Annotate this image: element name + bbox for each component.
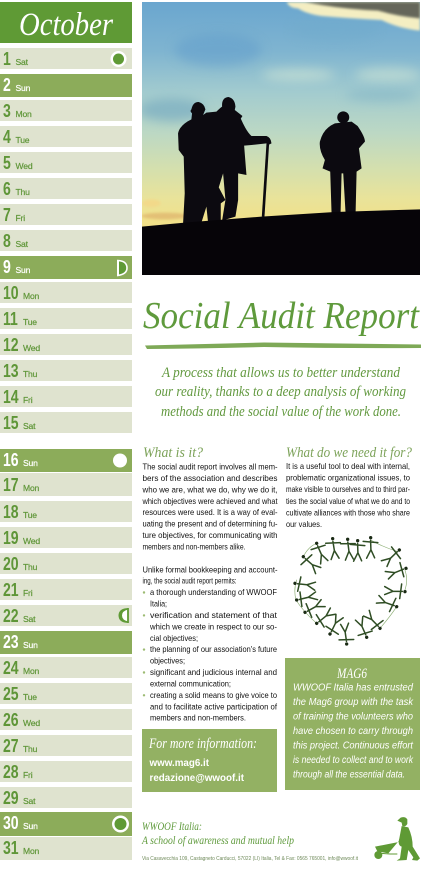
panel heading: For more information: <box>148 736 257 752</box>
day 7: 7 <box>3 205 11 225</box>
day 21: Fri <box>23 588 32 598</box>
website and email: redazione@wwoof.it <box>150 773 244 784</box>
day 2: 2 <box>3 75 11 95</box>
panel: for more information <box>142 729 277 792</box>
footer: organisation name and motto: WWOOF Italia: <box>142 819 202 833</box>
text block: what do we need it for: our values. <box>286 519 322 529</box>
illustration: heart-shaped ring of people holding hands <box>293 536 408 646</box>
day 22 with last quarter moon icon <box>0 605 132 626</box>
day 26: Wed <box>23 718 40 728</box>
text block: what do we need it for <box>286 461 410 529</box>
text block: what is it: objectives; <box>150 656 185 666</box>
text block: what is it: verification and statement of that <box>150 610 278 620</box>
text block: what is it: Italia; <box>150 598 167 608</box>
day 12: 12 <box>3 335 19 355</box>
day 22 with last quarter moon icon: Sat <box>23 614 35 624</box>
day 24: Mon <box>23 666 39 676</box>
panel text: WWOOF Italia has entrusted <box>293 682 413 693</box>
day 29: Sat <box>23 796 35 806</box>
day 26: 26 <box>3 710 19 730</box>
heading: What is it?: What is it? <box>143 445 203 461</box>
day 25: 25 <box>3 684 19 704</box>
day 2 <box>0 74 132 97</box>
day 13: Thu <box>23 369 37 379</box>
day 23 <box>0 631 132 654</box>
text block: what is it <box>142 462 278 723</box>
footer: address: Via Casavecchia 109, Castagneto Carducci, 57022 (LI) Italia, Tel & Fax: 0565 765001, info@wwoof.it <box>142 856 359 862</box>
day 5: 5 <box>3 153 11 173</box>
day 9 with half moon icon: 9 <box>3 257 11 277</box>
day 3 <box>0 100 132 121</box>
day 10: Mon <box>23 291 39 301</box>
day 15 <box>0 412 132 433</box>
day 13: 13 <box>3 361 19 381</box>
day 8 <box>0 230 132 251</box>
text block: what is it: members and non-members. <box>150 713 246 723</box>
day 30 with full moon icon <box>0 812 132 836</box>
day 31: Mon <box>23 846 39 856</box>
day 30 with full moon icon: 30 <box>3 813 19 833</box>
day 31: 31 <box>3 838 19 858</box>
day 19: 19 <box>3 528 19 548</box>
day 21: 21 <box>3 580 19 600</box>
day 15: Sat <box>23 421 35 431</box>
day 11: 11 <box>3 309 18 329</box>
day 9 with half moon icon: Sun <box>16 265 30 275</box>
day 20: 20 <box>3 554 19 574</box>
day 12: Wed <box>23 343 40 353</box>
panel text: of training the volunteers who <box>293 711 413 722</box>
panel text: have chosen to carry through <box>293 726 413 737</box>
day 25 <box>0 683 132 704</box>
day 23: 23 <box>3 632 19 652</box>
day 6: 6 <box>3 179 11 199</box>
panel heading: MAG6 <box>336 666 367 682</box>
text block: what is it: cial objectives; <box>150 633 198 643</box>
day 24 <box>0 657 132 678</box>
day 1 with full moon icon: 1 <box>3 49 11 69</box>
website and email: www.mag6.it <box>150 758 209 769</box>
day 6: Thu <box>16 187 30 197</box>
day 1 with full moon icon <box>0 48 132 69</box>
day 6 <box>0 178 132 199</box>
day 14 <box>0 386 132 407</box>
website and email <box>150 758 244 784</box>
day 3: Mon <box>16 109 32 119</box>
text block: what is it: ing, the social audit report permits: <box>142 576 236 586</box>
day 18: 18 <box>3 502 19 522</box>
day 24: 24 <box>3 658 19 678</box>
day 4: Tue <box>16 135 29 145</box>
day 17: Mon <box>23 483 39 493</box>
day 21 <box>0 579 132 600</box>
day 23: Sun <box>23 640 38 650</box>
month header: October <box>19 7 113 43</box>
day 27: Thu <box>23 744 37 754</box>
footer: organisation name and motto <box>141 819 294 847</box>
day 3: 3 <box>3 101 11 121</box>
day 4: 4 <box>3 127 11 147</box>
day 5: Wed <box>16 161 32 171</box>
panel text: this project. Continuous effort <box>293 740 414 751</box>
day 25: Tue <box>23 692 37 702</box>
day 18: Tue <box>23 510 37 520</box>
day 10 <box>0 282 132 303</box>
day 27: 27 <box>3 736 19 756</box>
day 27 <box>0 735 132 756</box>
day 28: 28 <box>3 762 19 782</box>
day 28: Fri <box>23 770 32 780</box>
subtitle <box>155 365 406 420</box>
title brush underline <box>145 342 421 349</box>
day 14: 14 <box>3 387 19 407</box>
day 11 <box>0 308 132 329</box>
text block: what is it: external communication; <box>150 678 231 688</box>
dark hillside <box>142 209 420 275</box>
day 4 <box>0 126 132 147</box>
day 17 <box>0 473 132 496</box>
day 20 <box>0 553 132 574</box>
day 13 <box>0 360 132 381</box>
day 31 <box>0 837 132 860</box>
day 7: Fri <box>16 213 25 223</box>
day 19 <box>0 527 132 548</box>
day 8: Sat <box>16 239 28 249</box>
day 9 with half moon icon <box>0 256 132 279</box>
photo: three hikers silhouetted at sunset <box>142 2 420 275</box>
day 16 with new moon icon: 16 <box>3 450 19 470</box>
day 7 <box>0 204 132 225</box>
day 11: Tue <box>23 317 37 327</box>
panel text: the Mag6 group with the task <box>293 697 414 708</box>
day 29: 29 <box>3 788 19 808</box>
day 17: 17 <box>3 475 19 495</box>
day 16 with new moon icon: Sun <box>23 458 38 468</box>
panel text <box>293 682 414 780</box>
day 2: Sun <box>16 83 30 93</box>
day 15: 15 <box>3 413 19 433</box>
day 30 with full moon icon: Sun <box>23 821 38 831</box>
panel text: through all the essential data. <box>293 769 405 780</box>
pair of hikers with staff <box>178 97 271 224</box>
day 19: Wed <box>23 536 40 546</box>
day 8: 8 <box>3 231 11 251</box>
day 10: 10 <box>3 283 19 303</box>
day 26 <box>0 709 132 730</box>
day 18 <box>0 501 132 522</box>
text block: what is it: members and non-members alike. <box>142 541 246 551</box>
day 12 <box>0 334 132 355</box>
day 29 <box>0 787 132 808</box>
day 20: Thu <box>23 562 37 572</box>
panel: October calendar <box>0 2 132 860</box>
panel: MAG6 <box>285 658 420 790</box>
day 1 with full moon icon: Sat <box>16 57 28 67</box>
day 22 with last quarter moon icon: 22 <box>3 606 19 626</box>
day 28 <box>0 761 132 782</box>
day 5 <box>0 152 132 173</box>
day 14: Fri <box>23 395 32 405</box>
lone hiker <box>320 111 365 213</box>
icon: man pushing wheelbarrow <box>374 817 420 861</box>
day 16 with new moon icon <box>0 449 132 472</box>
